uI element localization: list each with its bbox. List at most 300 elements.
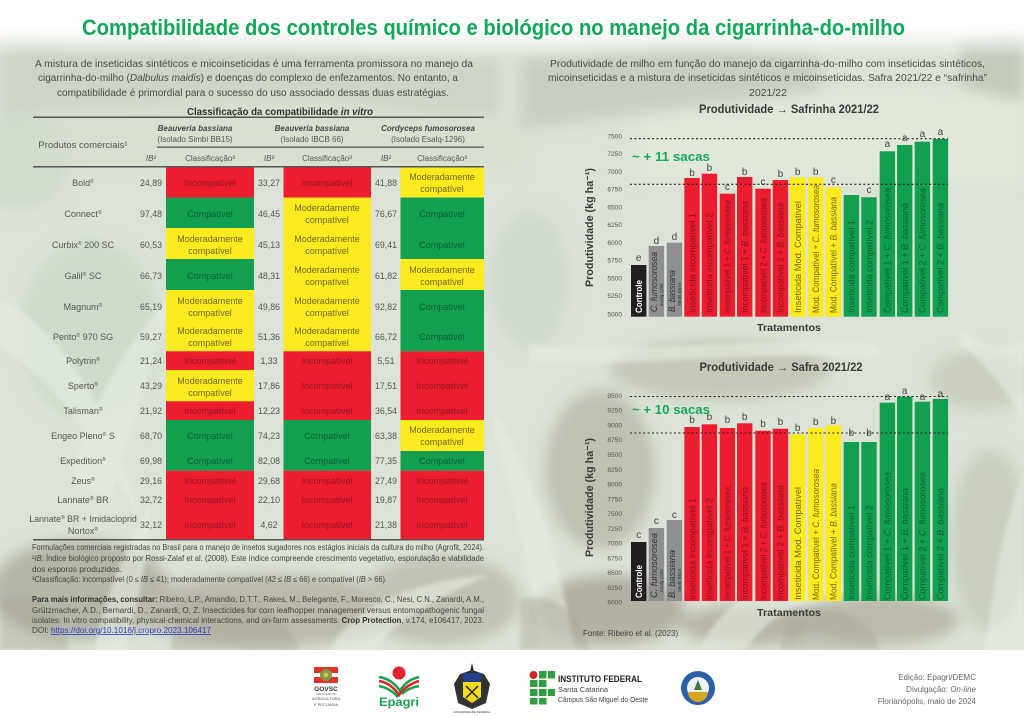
bar labels: Controle: [634, 280, 645, 313]
classification labels: Compatível: [419, 332, 465, 342]
IB values: 5,51: [377, 356, 395, 366]
product names: ®: [99, 406, 103, 413]
source note: Fonte: Ribeiro et al. (2023): [583, 629, 678, 638]
significance letters: a: [885, 392, 891, 403]
significance letters: b: [813, 417, 819, 428]
bar labels: Inseticida incompatível 1: [687, 498, 698, 600]
significance letters: [636, 386, 944, 541]
classification labels: Moderadamente: [409, 172, 475, 182]
IB values: 69,41: [375, 240, 397, 250]
product names: ®: [96, 356, 100, 363]
classification labels: Compatível: [187, 271, 233, 281]
IB values: 27,49: [375, 476, 397, 486]
publication credits: Edição: Epagri/DEMC: [898, 673, 976, 682]
table header: (Isolado Simbi BB15): [157, 135, 233, 144]
IB values: 92,82: [375, 302, 397, 312]
bar labels: Incompatível 1 + C. fumosorosea: [723, 487, 734, 600]
significance letters: d: [672, 232, 677, 243]
bar labels: Inseticida compatível 1: [847, 220, 858, 313]
classification labels: Incompatível: [416, 381, 468, 391]
product names: Zeus: [71, 476, 91, 486]
IB values: 24,89: [140, 178, 162, 188]
bar labels: Mod. Compatível + C. fumosorosea: [811, 469, 822, 600]
IB values: 12,23: [258, 406, 280, 416]
significance letters: b: [742, 167, 748, 178]
further reading reference: [32, 595, 484, 635]
classification labels: Incompatível: [416, 356, 468, 366]
significance letters: c: [760, 177, 766, 188]
product names: ®: [61, 514, 65, 521]
right description paragraph: Produtividade de milho em função do manejo da cigarrinha-do-milho com inseticidas sintéticos,: [550, 58, 985, 70]
product names: BR: [94, 495, 109, 505]
chart title: Produtividade → Safrinha 2021/22: [699, 104, 879, 116]
classification labels: Compatível: [187, 456, 233, 466]
y axis ticks: 9000: [607, 422, 622, 430]
y axis ticks: 8750: [607, 437, 622, 444]
significance letters: a: [902, 133, 908, 144]
further reading reference: DOI: https://doi.org/10.1016/j.cropro.2023.106417: [32, 626, 212, 635]
bar labels: Inseticida incompatível 2: [705, 213, 716, 313]
product names: ®: [94, 526, 98, 533]
classification labels: compatível: [420, 277, 464, 287]
table header: IB²: [264, 154, 274, 163]
product names: Engeo Pleno: [51, 431, 103, 441]
significance letters: c: [866, 185, 872, 196]
y axis ticks: 6000: [607, 600, 622, 606]
table header: [33, 116, 484, 168]
classification labels: Incompatível: [301, 520, 353, 530]
significance letters: a: [938, 389, 944, 400]
y axis title: Produtividade (kg ha⁻¹): [584, 168, 596, 287]
bar labels: Simbi BB15: [677, 282, 682, 306]
significance letters: b: [725, 415, 731, 426]
classification labels: Incompatível: [416, 520, 468, 530]
bar labels: Incompatível 1 + B. bassiana: [740, 201, 751, 313]
table footnotes: dos esporos produzidos.: [32, 565, 122, 574]
classification labels: Moderadamente: [177, 326, 243, 336]
product names: Lannate: [57, 495, 90, 505]
right description paragraph: [548, 58, 987, 99]
IB values: 65,19: [140, 302, 162, 312]
classification labels: Incompatível: [184, 178, 236, 188]
IB values: 77,35: [375, 456, 397, 466]
product names: Nortox: [68, 526, 94, 536]
significance letters: a: [938, 127, 944, 138]
reference dotted lines: [630, 396, 948, 433]
significance letters: a: [920, 392, 926, 403]
y axis ticks: 7000: [607, 169, 622, 176]
logo: GOVSC: AGRICULTURA: [312, 696, 341, 701]
classification labels: compatível: [188, 338, 232, 348]
significance letters: c: [725, 182, 730, 193]
IB values: 51,36: [258, 332, 280, 342]
bar labels: C. fumosorosea: [649, 533, 659, 598]
product names: Curbix: [52, 240, 78, 250]
bar labels: Controle: [634, 565, 645, 598]
IB values: 1,33: [260, 356, 278, 366]
table header: (Isolado Esalq-1296): [391, 135, 465, 144]
classification cells, column 3: [400, 168, 484, 539]
IB values: 22,10: [258, 495, 280, 505]
IB values: 41,88: [375, 178, 397, 188]
further reading reference: Grützmacher, A.D., Bernardi, D., Zanardi, O, Z. Insecticides for corn leafhopper management versus entomopathogenic fungal: [32, 606, 484, 615]
bar labels: Inseticida compatível 2: [864, 505, 875, 600]
significance letters: b: [795, 423, 801, 434]
IB values: 43,29: [140, 381, 162, 391]
classification labels: Moderadamente: [409, 265, 475, 275]
y axis ticks: [607, 134, 622, 318]
logo: GOVSC: [312, 667, 341, 707]
chart: Safrinha 2021/22: [584, 104, 948, 334]
product names: Expedition: [60, 456, 102, 466]
significance letters: [636, 127, 944, 264]
table header: (Isolado IBCB 66): [280, 135, 344, 144]
y axis ticks: 6250: [607, 585, 622, 592]
table footnotes: ³Classificação: incompatível (0 ≤ IB ≤ 41); moderadamente compatível (42 ≤ IB ≤ 66) e compatível (IB > 66).: [32, 575, 387, 584]
product names: 200 SC: [82, 240, 115, 250]
product names: ®: [94, 381, 98, 388]
product names: ®: [102, 456, 106, 463]
IB values: 21,92: [140, 406, 162, 416]
bar labels: Inseticida incompatível 1: [687, 213, 698, 313]
significance letters: b: [778, 417, 784, 428]
classification labels: Incompatível: [301, 178, 353, 188]
reference dotted lines: [630, 139, 948, 184]
classification cells, column 2: [284, 168, 371, 539]
y axis title: Produtividade (kg ha⁻¹): [584, 438, 596, 557]
bar labels: Compatível 1 + C. fumosorosea: [883, 188, 894, 313]
table footnotes: Formulações comerciais registradas no Brasil para o manejo de insetos sugadores nos estágios iniciais da cultura do milho (Agrofit, 2024).: [32, 543, 484, 552]
classification labels: Moderadamente: [294, 265, 360, 275]
table header: Produtos comerciais¹: [38, 140, 128, 151]
significance letters: d: [654, 236, 659, 247]
y axis ticks: 8500: [607, 452, 622, 459]
table header: Classificação³: [417, 154, 467, 163]
y axis ticks: [607, 393, 622, 606]
logo: Epagri: [379, 666, 419, 709]
bar labels: [634, 469, 947, 600]
product names: BR + Imidacloprid: [65, 514, 137, 524]
IB values: 46,45: [258, 209, 280, 219]
IB values: 69,98: [140, 456, 162, 466]
classification labels: compatível: [305, 246, 349, 256]
table footnotes: [32, 543, 485, 584]
IB values: 97,48: [140, 209, 162, 219]
further reading reference: Para mais informações, consultar: Ribeiro, L.P., Amandio, D.T.T., Rakes, M., Belegante, F., Moresco, C., Nesi, C.N., Zanardi, A.M.,: [32, 595, 484, 604]
table footnotes: ²IB: Índice biológico proposto por Rossi-Zalaf et al. (2008). Este índice compreende crescimento vegetativo, esporulação e viabilidade: [32, 554, 485, 563]
bar labels: B. bassiana: [667, 550, 677, 598]
intro paragraph: cigarrinha-do-milho (Dalbulus maidis) e doenças do complexo de enfezamentos. No entanto, a: [38, 72, 458, 84]
classification labels: Compatível: [419, 240, 465, 250]
significance letters: a: [920, 129, 926, 140]
classification labels: Incompatível: [184, 406, 236, 416]
classification labels: Moderadamente: [177, 296, 243, 306]
product names: Magnum: [64, 302, 99, 312]
product names: Talisman: [63, 406, 99, 416]
IB values: 29,16: [140, 476, 162, 486]
significance letters: c: [654, 516, 659, 527]
table header: Classificação³: [185, 154, 235, 163]
classification labels: Compatível: [187, 209, 233, 219]
product names: S: [106, 431, 115, 441]
y axis ticks: 6750: [607, 186, 622, 194]
classification labels: Compatível: [419, 302, 465, 312]
product names: 970 SG: [80, 332, 113, 342]
classification labels: Incompatível: [301, 356, 353, 366]
IB values: 74,23: [258, 431, 280, 441]
x axis title: Tratamentos: [757, 322, 821, 334]
significance letters: a: [902, 386, 908, 397]
bar labels: Mod. Compatível + B. bassiana: [829, 483, 840, 600]
logo: Epagri: Epagri: [379, 697, 419, 709]
IB values: 60,53: [140, 240, 162, 250]
product names: Bold: [72, 178, 90, 188]
y axis ticks: 9500: [607, 393, 622, 400]
product names: ®: [91, 476, 95, 483]
classification labels: Incompatível: [184, 356, 236, 366]
IB values: [140, 178, 397, 530]
classification labels: compatível: [305, 338, 349, 348]
classification labels: Moderadamente: [294, 296, 360, 306]
bar labels: Incompatível 2 + C. fumosorosea: [758, 482, 769, 600]
significance letters: b: [742, 412, 748, 423]
significance letters: e: [636, 253, 642, 264]
bar labels: Mod. Compatível + B. bassiana: [829, 197, 840, 313]
bar labels: Incompatível 2 + C. fumosorosea: [758, 198, 769, 313]
y axis ticks: 7750: [607, 496, 622, 504]
bar labels: B. bassiana: [667, 270, 677, 312]
bars: [631, 139, 948, 317]
table heading: Classificação da compatibilidade in vitro: [187, 106, 374, 118]
IB values: 76,67: [375, 209, 397, 219]
significance letters: b: [689, 168, 695, 179]
bar labels: Compatível 2 + C. fumosorosea: [918, 188, 929, 313]
logo: UFSC crest: [453, 663, 491, 714]
significance letters: b: [866, 428, 872, 439]
classification labels: Incompatível: [301, 495, 353, 505]
intro paragraph: [35, 58, 473, 99]
classification labels: Moderadamente: [409, 425, 475, 435]
IB values: 32,12: [140, 520, 162, 530]
product names: Connect: [64, 209, 98, 219]
significance letters: b: [813, 167, 819, 178]
significance letters: b: [707, 412, 713, 423]
IB values: 21,38: [375, 520, 397, 530]
classification labels: compatível: [305, 215, 349, 225]
y axis ticks: 7500: [607, 511, 622, 518]
classification labels: Incompatível: [184, 520, 236, 530]
logo: GOVSC: GOVSC: [314, 686, 338, 693]
IB values: 4,62: [260, 520, 278, 530]
significance letters: b: [849, 428, 855, 439]
classification labels: compatível: [420, 184, 464, 194]
classification labels: compatível: [305, 277, 349, 287]
product names: [29, 178, 137, 536]
IB values: 19,87: [375, 495, 397, 505]
callout: gain in bags: ~ + 11 sacas: [632, 149, 710, 164]
classification labels: Incompatível: [416, 495, 468, 505]
y axis ticks: 9250: [607, 408, 622, 414]
bar labels: Compatível 1 + B. bassiana: [900, 203, 911, 313]
logo: round university seal: [681, 671, 715, 705]
title: Compatibilidade dos controles químico e biológico no manejo da cigarrinha-do-milho: [82, 15, 905, 40]
bar labels: Compatível 1 + B. bassiana: [900, 488, 911, 600]
product names: ®: [99, 302, 103, 309]
IB values: 32,72: [140, 495, 162, 505]
IB values: 68,70: [140, 431, 162, 441]
table header: IB²: [381, 154, 391, 163]
intro paragraph: compatibilidade é primordial para o sucesso do uso associado dessas duas estratégias.: [57, 87, 449, 99]
IB values: 17,51: [375, 381, 397, 391]
IB values: 33,27: [258, 178, 280, 188]
logo: Instituto Federal: [530, 671, 648, 704]
table header: IB²: [146, 154, 156, 163]
right description paragraph: micoinseticidas e a mistura de inseticidas sintéticos e micoinseticidas. Safra 2021/22 e “safrinha”: [548, 72, 987, 84]
classification labels: Compatível: [304, 456, 350, 466]
significance letters: b: [831, 416, 837, 427]
IB values: 61,82: [375, 271, 397, 281]
IB values: 21,24: [140, 356, 162, 366]
classification cells, column 1: [166, 168, 254, 539]
product names: ®: [98, 209, 102, 216]
y axis ticks: 7250: [607, 526, 622, 533]
product names: ®: [103, 431, 107, 438]
significance letters: b: [795, 167, 801, 178]
significance letters: b: [778, 169, 784, 180]
x axis title: Tratamentos: [757, 607, 821, 619]
bar labels: Incompatível 2 + B. bassiana: [776, 203, 787, 313]
classification labels: compatível: [420, 437, 464, 447]
y axis ticks: 5000: [607, 312, 622, 318]
y axis ticks: 7250: [607, 151, 622, 158]
table header: Classificação³: [302, 154, 352, 163]
product names: Polytrin: [66, 356, 96, 366]
bar labels: Incompatível 2 + B. bassiana: [776, 485, 787, 600]
IB values: 49,86: [258, 302, 280, 312]
intro paragraph: A mistura de inseticidas sintéticos e micoinseticidas é uma ferramenta promissora no manejo da: [35, 58, 473, 70]
product names: Perito: [53, 332, 76, 342]
IB values: 36,54: [375, 406, 397, 416]
product names: ®: [90, 178, 94, 185]
classification labels: compatível: [188, 246, 232, 256]
right description paragraph: 2021/22: [749, 87, 787, 99]
further reading reference: isolates: In vitro compatibility, physical-chemical interactions, and on-farm assessments. Crop Protection, v.174, e106417, 2023.: [32, 616, 484, 625]
logo: Instituto Federal: Santa Catarina: [558, 685, 609, 694]
product names: Lannate: [29, 514, 61, 524]
y axis ticks: 6500: [607, 570, 622, 577]
publication credits: Florianópolis, maio de 2024: [878, 697, 977, 706]
classification labels: Incompatível: [301, 476, 353, 486]
y axis ticks: 8000: [607, 482, 622, 488]
product names: ®: [83, 271, 87, 278]
y axis ticks: 7500: [607, 134, 622, 140]
logo: GOVSC: E PECUÁRIA: [314, 702, 338, 707]
y axis ticks: 5500: [607, 276, 622, 282]
table header: Beauveria bassiana: [158, 124, 233, 133]
y axis ticks: 6750: [607, 556, 622, 562]
classification labels: Compatível: [419, 209, 465, 219]
logo: Instituto Federal: INSTITUTO FEDERAL: [558, 674, 642, 684]
significance letters: b: [707, 163, 713, 174]
bar labels: Compatível 2 + C. fumosorosea: [918, 472, 929, 600]
bar labels: Inseticida Mod. Compatível: [793, 201, 804, 313]
chart: Safra 2021/22: [584, 362, 948, 619]
classification labels: Incompatível: [301, 381, 353, 391]
panel: compatibility table: [29, 106, 484, 540]
classification labels: Incompatível: [416, 476, 468, 486]
bar labels: Incompatível 1 + B. bassiana: [740, 487, 751, 600]
bar labels: C. fumosorosea: [649, 252, 659, 312]
product names: Galil: [65, 271, 83, 281]
classification labels: Moderadamente: [294, 203, 360, 213]
logo: Instituto Federal: Câmpus São Miguel do Oeste: [558, 695, 648, 704]
classification labels: Incompatível: [301, 406, 353, 416]
bar labels: Inseticida compatível 1: [847, 505, 858, 600]
IB values: 59,27: [140, 332, 162, 342]
bar labels: Esalq-1296: [659, 569, 664, 592]
bar labels: Compatível 1 + C. fumosorosea: [883, 472, 894, 600]
bar labels: Inseticida compatível 2: [864, 220, 875, 313]
significance letters: c: [636, 530, 641, 541]
classification labels: Moderadamente: [294, 326, 360, 336]
y axis ticks: 7000: [607, 540, 622, 548]
IB values: 29,68: [258, 476, 280, 486]
bar labels: Compatível 2 + B. bassiana: [936, 488, 947, 600]
product names: ®: [78, 240, 82, 247]
significance letters: a: [885, 139, 891, 150]
IB values: 66,72: [375, 332, 397, 342]
classification labels: Moderadamente: [177, 234, 243, 244]
IB values: 82,08: [258, 456, 280, 466]
classification labels: [177, 172, 475, 530]
publication credits: Divulgação: On-line: [906, 685, 977, 694]
table header: Cordyceps fumosorosea: [381, 124, 475, 133]
classification labels: Moderadamente: [294, 234, 360, 244]
IB values: 63,38: [375, 431, 397, 441]
classification labels: compatível: [188, 308, 232, 318]
significance letters: c: [672, 510, 677, 521]
product names: SC: [86, 271, 102, 281]
classification labels: Compatível: [304, 431, 350, 441]
classification labels: Compatível: [419, 456, 465, 466]
product names: ®: [90, 495, 94, 502]
IB values: 17,86: [258, 381, 280, 391]
bar labels: Mod. Compatível + C. fumosorosea: [811, 185, 822, 313]
classification labels: Incompatível: [416, 406, 468, 416]
y axis ticks: 5750: [607, 258, 622, 264]
bar labels: Esalq-1296: [659, 283, 664, 306]
bars: [631, 397, 948, 601]
classification labels: compatível: [188, 388, 232, 398]
significance letters: b: [760, 419, 766, 430]
y axis ticks: 6500: [607, 204, 622, 212]
classification labels: compatível: [305, 308, 349, 318]
y axis ticks: 5250: [607, 293, 622, 300]
IB values: 48,31: [258, 271, 280, 281]
table header: Beauveria bassiana: [275, 124, 350, 133]
y axis ticks: 6250: [607, 222, 622, 229]
logo: GOVSC: SECRETARIA DE: [316, 693, 336, 696]
chart title: Produtividade → Safra 2021/22: [700, 362, 862, 374]
product names: ®: [76, 332, 80, 339]
bar labels: Compatível 2 + B. bassiana: [936, 203, 947, 313]
IB values: 45,13: [258, 240, 280, 250]
classification labels: Compatível: [187, 431, 233, 441]
bar labels: Inseticida incompatível 2: [705, 498, 716, 600]
y axis ticks: 6000: [607, 240, 622, 247]
bar labels: [634, 185, 947, 313]
bar labels: Simbi BB15: [677, 568, 682, 592]
